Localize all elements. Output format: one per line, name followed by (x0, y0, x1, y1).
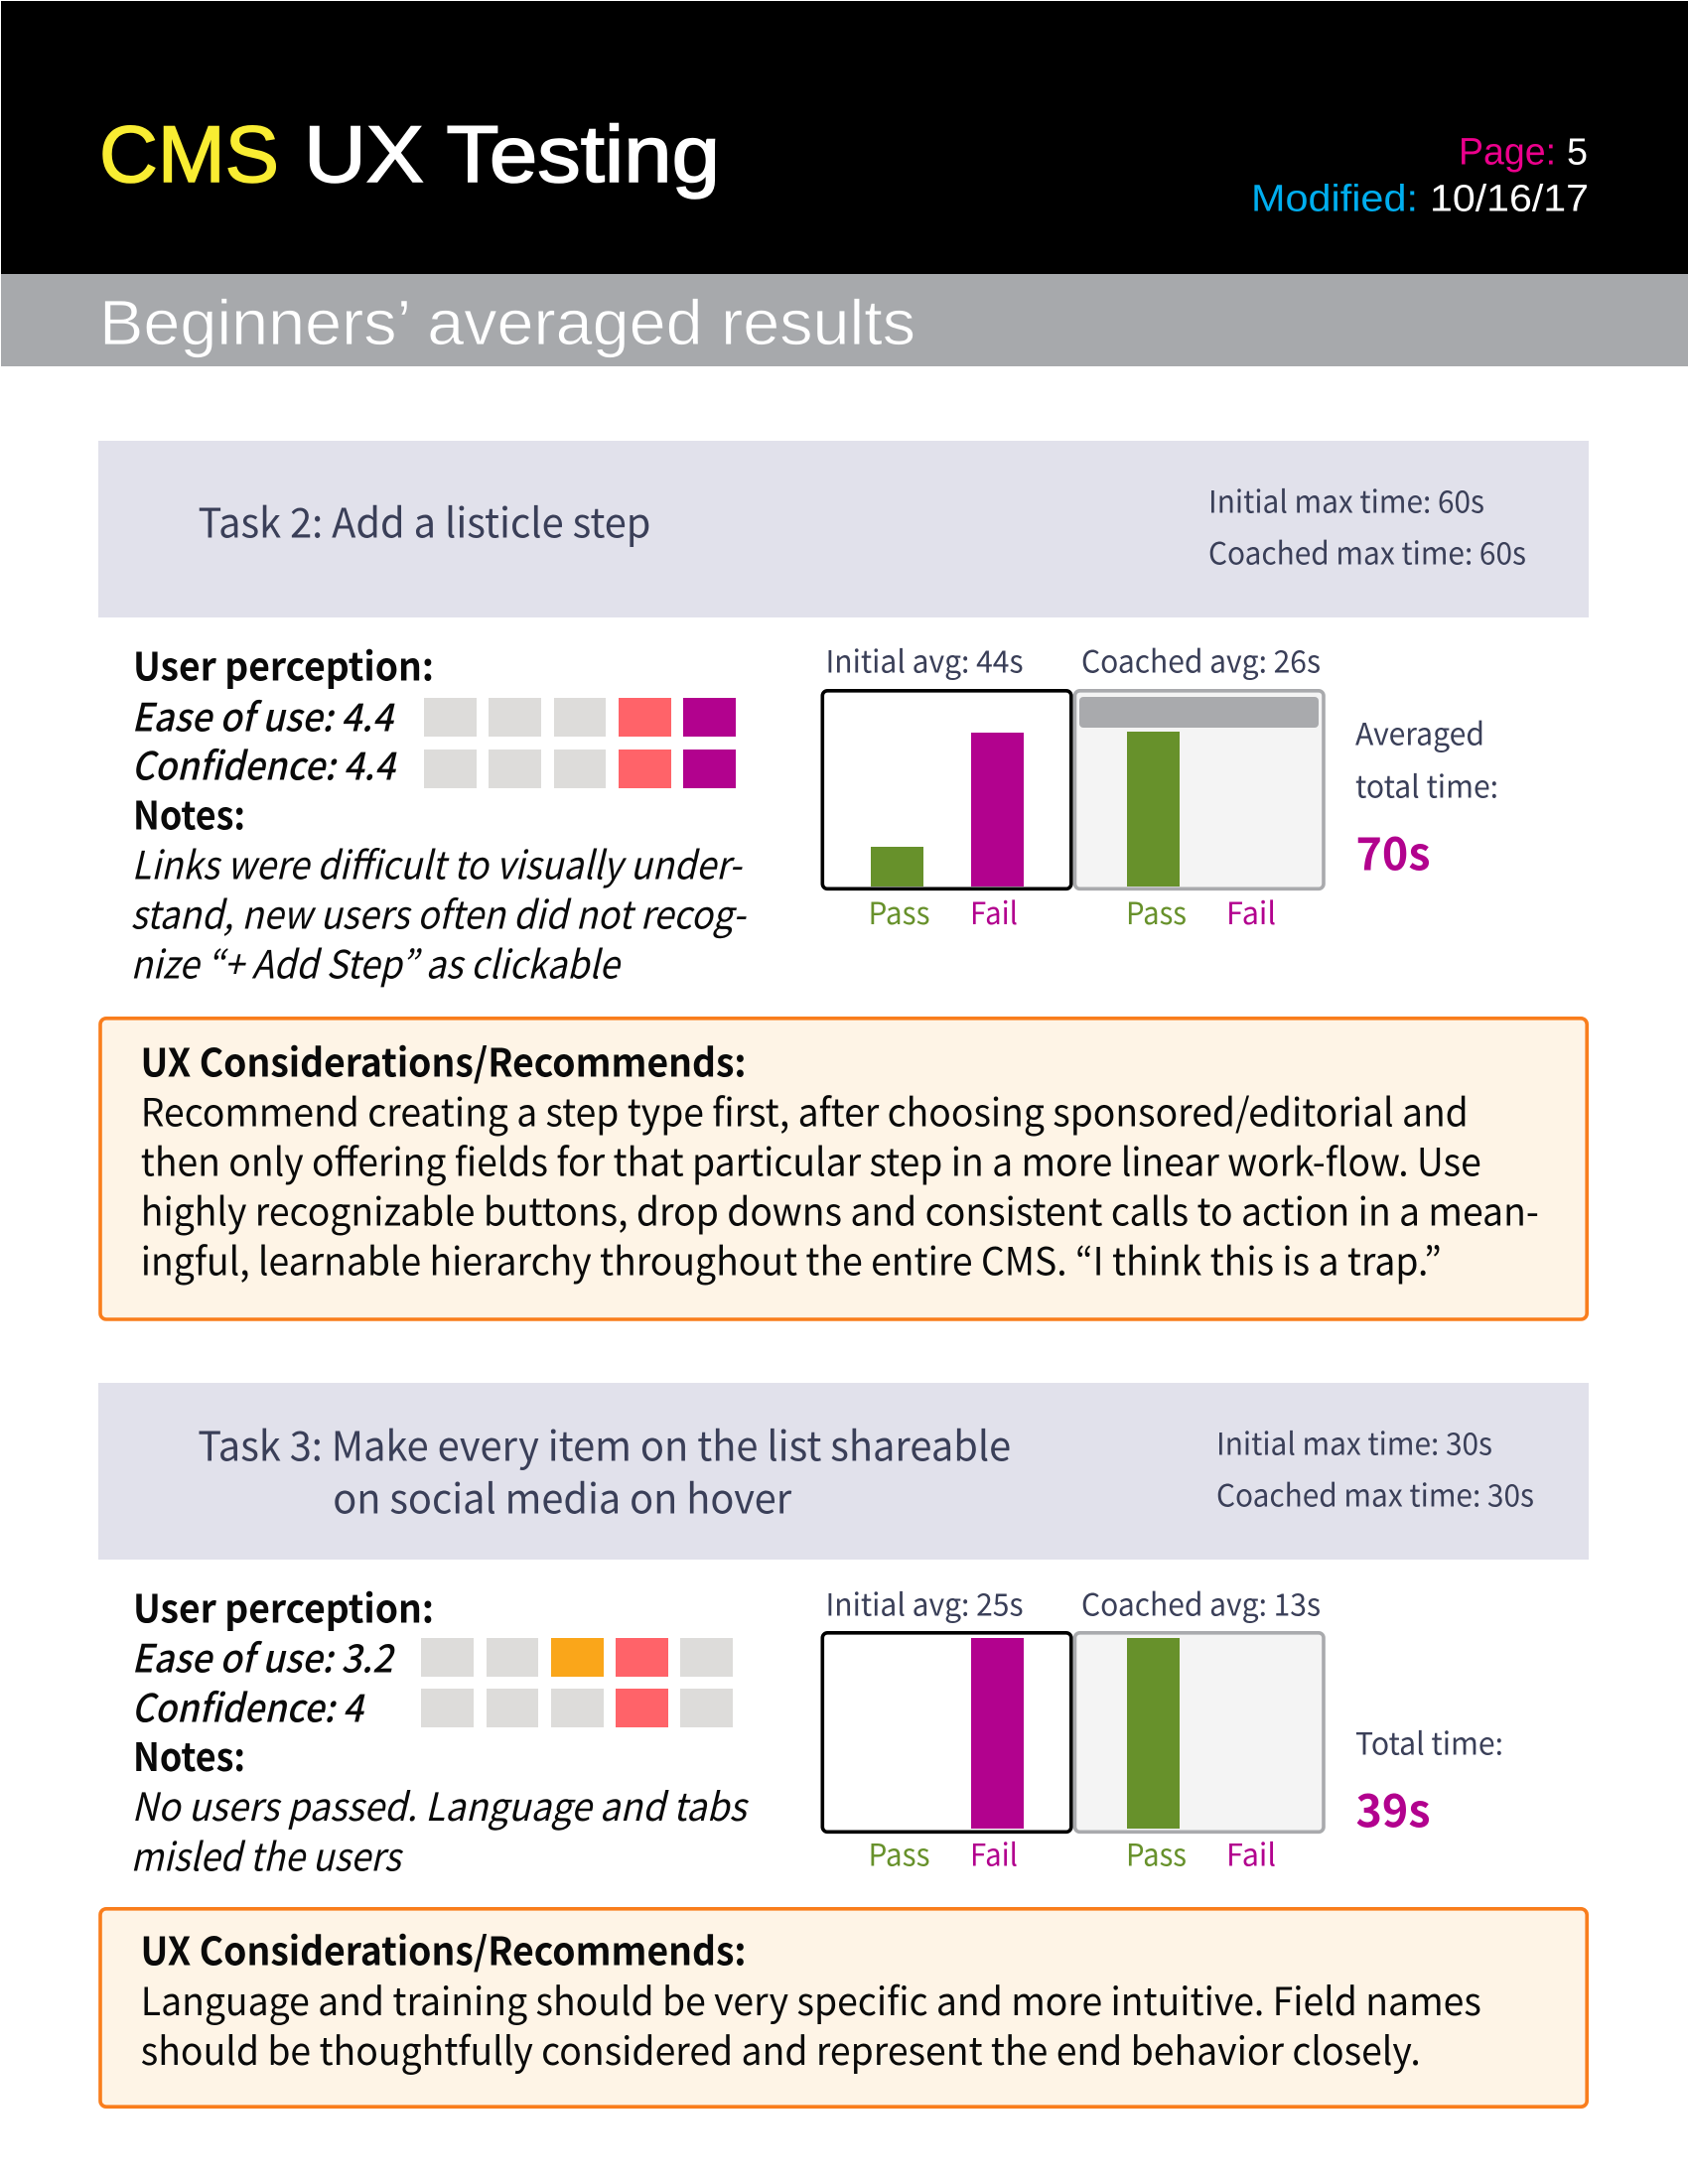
task 2 total time: Averaged (1355, 709, 1484, 754)
user perception heading: User perception: (133, 1578, 434, 1634)
callout: task 3 recommendations: UX Considerations/Recommends: (141, 1922, 747, 1978)
ease of use rating (131, 1628, 733, 1684)
task 3 total time: 39s (1356, 1775, 1430, 1841)
chart: task 2 coached attempt: Fail (1226, 888, 1276, 933)
ease of use rating: Ease of use: 3.2 (131, 1628, 396, 1684)
notes heading: Notes: (133, 1727, 245, 1783)
title: UX Testing (304, 110, 720, 200)
notes text: Links were difficult to visually under- (131, 836, 743, 891)
task 2 title: Task 2: Add a listicle step (199, 490, 651, 550)
chart: task 2 coached attempt: Coached avg: 26s (1081, 637, 1321, 681)
header band (1, 1, 1688, 274)
page number: Page: (1459, 132, 1556, 174)
task 3 total time: Total time: (1355, 1719, 1503, 1763)
modified date (1251, 179, 1589, 220)
user perception heading: User perception: (133, 637, 434, 693)
chart: task 3 initial attempt: Initial avg: 25s (826, 1580, 1023, 1624)
confidence rating: Confidence: 4 (131, 1678, 365, 1733)
chart: task 3 coached attempt: Fail (1226, 1831, 1276, 1874)
task 2 max times (1208, 477, 1526, 574)
task 3 max times (1216, 1420, 1534, 1515)
confidence rating (131, 737, 736, 792)
title (99, 110, 720, 200)
task 2 max times: Initial max time: 60s (1208, 477, 1484, 522)
notes text: stand, new users often did not recog- (131, 886, 747, 941)
task 2 total time: 70s (1356, 818, 1430, 884)
notes text: nize “+ Add Step” as clickable (131, 935, 623, 991)
callout: task 2 recommendations: then only offering fields for that particular step in a more linear work-flow. Use (141, 1132, 1481, 1187)
panel: task 2 user perception (131, 637, 747, 991)
task 3 max times: Initial max time: 30s (1216, 1420, 1492, 1463)
task 3 title (198, 1414, 1011, 1525)
chart: task 2 initial attempt: Initial avg: 44s (826, 637, 1023, 681)
task 2 total time (1355, 709, 1498, 884)
panel: task 3 user perception (131, 1578, 750, 1882)
page number: 5 (1567, 132, 1588, 174)
panel: task 2 header (98, 441, 1589, 617)
chart: task 3 initial attempt: Pass (868, 1831, 929, 1874)
chart: task 3 coached attempt: Pass (1126, 1831, 1187, 1874)
chart: task 2 initial attempt: Fail (970, 888, 1018, 933)
subtitle band (1, 274, 1688, 366)
callout: task 3 recommendations: should be thoughtfully considered and represent the end behavior closely. (141, 2021, 1421, 2077)
task 2 max times: Coached max time: 60s (1208, 528, 1526, 574)
notes heading: Notes: (133, 786, 245, 842)
task 3 max times: Coached max time: 30s (1216, 1471, 1534, 1515)
notes text (131, 1777, 750, 1882)
ease of use rating: Ease of use: 4.4 (131, 687, 395, 743)
callout: task 3 recommendations: Language and training should be very specific and more intuitive. Field names (141, 1972, 1481, 2027)
chart: task 3 initial attempt: Fail (970, 1831, 1018, 1874)
callout: task 3 recommendations (100, 1909, 1587, 2107)
chart: task 2 initial attempt (822, 637, 1071, 933)
callout: task 2 recommendations (100, 1019, 1587, 1319)
task 3 title: Task 3: Make every item on the list shareable (198, 1414, 1011, 1473)
callout: task 2 recommendations: Recommend creating a step type first, after choosing sponsored/editorial and (141, 1082, 1469, 1138)
confidence rating: Confidence: 4.4 (131, 737, 397, 792)
panel: task 3 header (98, 1383, 1589, 1560)
chart: task 3 coached attempt: Coached avg: 13s (1081, 1580, 1321, 1624)
chart: task 2 initial attempt: Pass (868, 888, 929, 933)
callout: task 2 recommendations: highly recognizable buttons, drop downs and consistent calls to action in a mean- (141, 1181, 1539, 1237)
chart: task 2 coached attempt: Pass (1126, 888, 1187, 933)
chart: task 2 coached attempt (1074, 637, 1324, 933)
notes text: No users passed. Language and tabs (131, 1777, 750, 1833)
modified date: Modified: (1251, 179, 1418, 220)
confidence rating (131, 1678, 733, 1733)
chart: task 3 initial attempt (822, 1580, 1071, 1874)
modified date: 10/16/17 (1430, 179, 1589, 220)
ease of use rating (131, 687, 736, 743)
task 3 title: on social media on hover (333, 1465, 791, 1525)
subtitle: Beginners’ averaged results (99, 287, 915, 358)
notes text: misled the users (131, 1827, 404, 1882)
title: CMS (99, 110, 279, 200)
callout: task 2 recommendations: UX Considerations/Recommends: (141, 1032, 747, 1088)
task 3 total time (1355, 1719, 1503, 1841)
notes text (131, 836, 747, 991)
task 2 total time: total time: (1355, 762, 1498, 806)
chart: task 3 coached attempt (1074, 1580, 1324, 1874)
callout: task 2 recommendations: ingful, learnable hierarchy throughout the entire CMS. “I think this is a trap.” (141, 1231, 1442, 1287)
